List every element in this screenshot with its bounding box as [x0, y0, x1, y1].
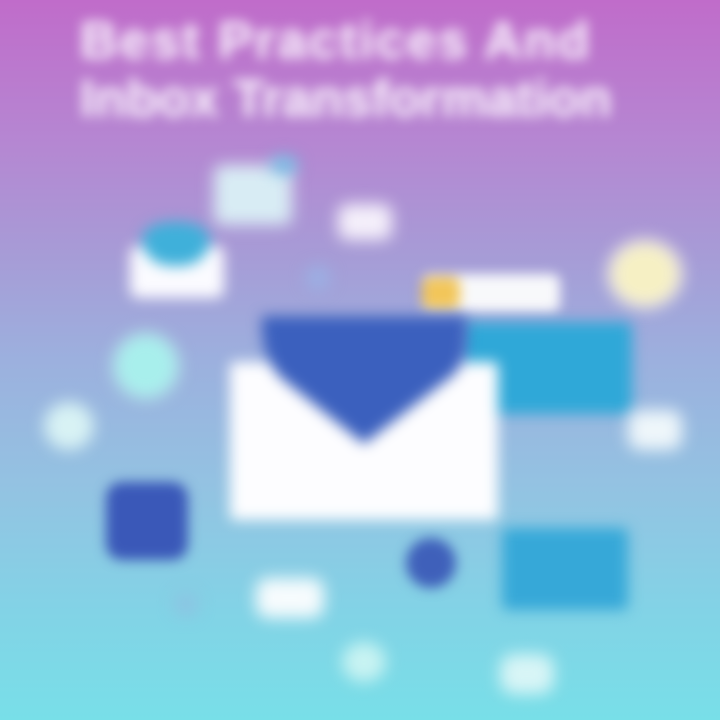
- icon: white badge right: [628, 410, 682, 450]
- title: [74, 12, 617, 128]
- title: Inbox Transformation: [80, 70, 612, 128]
- icon: floating message card: [214, 165, 292, 225]
- icon: blue spark: [270, 156, 298, 174]
- icon: teal circle: [116, 336, 176, 396]
- icon: yellow and white label pill: [413, 266, 568, 318]
- icon: pale badge bottom right: [500, 654, 554, 694]
- title: Best Practices And: [80, 12, 592, 70]
- icon: dark blue rounded square: [106, 482, 188, 560]
- envelope flap: [253, 304, 475, 452]
- icon: large envelope: [221, 304, 509, 530]
- icon: white badge bottom: [256, 578, 324, 618]
- icon: pale circle left: [44, 402, 94, 450]
- icon: pale yellow circle: [612, 244, 678, 304]
- icon: dark blue dot: [406, 538, 456, 588]
- icon: faint blue dot: [306, 266, 330, 290]
- panel: teal card lower right: [502, 528, 628, 610]
- icon: small white badge: [338, 204, 392, 240]
- icon: faint dot bottom: [174, 592, 198, 616]
- panel: teal card behind envelope: [462, 322, 632, 414]
- icon: small envelope with teal flap: [122, 212, 232, 306]
- icon: pale circle bottom: [342, 642, 386, 682]
- envelope body: [230, 362, 498, 520]
